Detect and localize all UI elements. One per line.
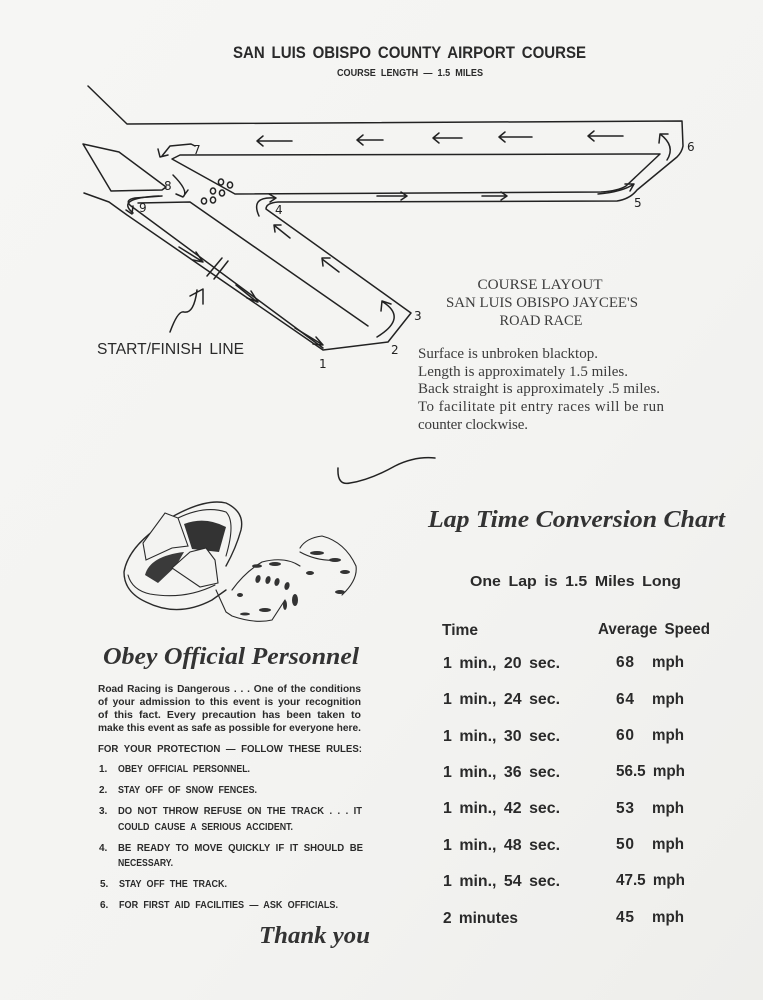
row 6: 50 [616, 836, 634, 853]
row 2: 1 min., 24 sec. [443, 691, 560, 708]
row 4: 56.5 mph [616, 763, 685, 780]
course description: To facilitate pit entry races will be run [418, 399, 664, 415]
course description: counter clockwise. [418, 417, 528, 433]
row 6: 1 min., 48 sec. [443, 837, 560, 854]
row 4: 1 min., 36 sec. [443, 764, 560, 781]
lap chart title: Lap Time Conversion Chart [427, 507, 726, 533]
rule 2: STAY OFF OF SNOW FENCES. [118, 785, 257, 796]
table header: Average Speed [598, 621, 710, 638]
rule 1: OBEY OFFICIAL PERSONNEL. [118, 764, 250, 775]
row 8: mph [652, 909, 684, 926]
course layout heading: ROAD RACE [500, 313, 582, 329]
row 5 [443, 800, 684, 817]
subtitle: COURSE LENGTH — 1.5 MILES [337, 67, 483, 79]
safety intro paragraph: of your admission to this event is your recognition [98, 697, 361, 708]
track outer boundary [84, 86, 683, 350]
lap chart subtitle: One Lap is 1.5 Miles Long [470, 573, 681, 590]
start finish label: START/FINISH LINE [97, 341, 244, 358]
rule 1: 1. [99, 764, 108, 775]
row 2: mph [652, 691, 684, 708]
paddock building [83, 144, 166, 191]
row 5: mph [652, 800, 684, 817]
course description: Surface is unbroken blacktop. [418, 346, 598, 362]
rules list [98, 744, 363, 911]
row 8: 45 [616, 909, 634, 926]
pit markers [201, 179, 233, 204]
start finish pointer [170, 289, 203, 332]
icon: helmet and gloves sketch [124, 502, 356, 621]
course map: 2 [391, 343, 399, 357]
rule 4 [99, 843, 363, 869]
course layout heading [446, 277, 638, 329]
rule 4: NECESSARY. [118, 858, 173, 869]
row 2: 64 [616, 691, 634, 708]
thank you: Thank you [259, 923, 370, 949]
row 5: 53 [616, 800, 634, 817]
rules heading: FOR YOUR PROTECTION — FOLLOW THESE RULES: [98, 744, 362, 755]
row 3: mph [652, 727, 684, 744]
rule 4: 4. [99, 843, 108, 854]
course map: 4 [275, 203, 283, 217]
course map: 7 [193, 143, 201, 157]
turn arrows [126, 144, 394, 345]
course map: 8 [164, 179, 172, 193]
lap time table [442, 621, 710, 927]
course description: Back straight is approximately .5 miles. [418, 381, 660, 397]
glove cuff and fingers [216, 536, 356, 621]
row 4 [443, 763, 685, 781]
course map: 5 [634, 196, 642, 210]
row 3: 1 min., 30 sec. [443, 728, 560, 745]
rule 3: DO NOT THROW REFUSE ON THE TRACK . . . IT [118, 806, 362, 817]
rule 5: STAY OFF THE TRACK. [119, 879, 227, 890]
table header [442, 621, 710, 639]
safety heading: Obey Official Personnel [103, 644, 359, 670]
safety intro paragraph: make this event as safe as possible for everyone here. [98, 723, 361, 734]
row 6 [443, 836, 684, 854]
safety intro paragraph [98, 684, 361, 734]
row 7: 47.5 mph [616, 872, 685, 889]
row 3: 60 [616, 727, 634, 744]
course map: 3 [414, 309, 422, 323]
rule 4: BE READY TO MOVE QUICKLY IF IT SHOULD BE [118, 843, 363, 854]
track inner infield south [128, 196, 368, 348]
row 7: 1 min., 54 sec. [443, 873, 560, 890]
table header: Time [442, 622, 478, 639]
row 8 [443, 909, 684, 927]
course layout heading: COURSE LAYOUT [478, 277, 602, 293]
row 7 [443, 872, 685, 890]
row 8: 2 minutes [443, 910, 518, 927]
safety intro paragraph: Road Racing is Dangerous . . . One of the conditions [98, 684, 361, 695]
rule 3: COULD CAUSE A SERIOUS ACCIDENT. [118, 822, 293, 833]
rule 2: 2. [99, 785, 108, 796]
row 1: mph [652, 654, 684, 671]
row 3 [443, 727, 684, 745]
course map: 6 [687, 140, 695, 154]
rule 6: 6. [100, 900, 109, 911]
course map [83, 86, 695, 371]
glove markings [237, 551, 350, 616]
course description [418, 346, 664, 433]
dark helmet lining [184, 521, 226, 552]
start finish line mark [207, 258, 228, 279]
course layout heading: SAN LUIS OBISPO JAYCEE'S [446, 295, 638, 311]
rule 3 [99, 806, 362, 833]
rule 6: FOR FIRST AID FACILITIES — ASK OFFICIALS. [119, 900, 338, 911]
row 1 [443, 654, 684, 672]
row 1: 1 min., 20 sec. [443, 655, 560, 672]
row 6: mph [652, 836, 684, 853]
rule 3: 3. [99, 806, 108, 817]
row 1: 68 [616, 654, 634, 671]
course map: 9 [139, 201, 147, 215]
row 5: 1 min., 42 sec. [443, 800, 560, 817]
hand drawn squiggle [338, 458, 435, 483]
direction arrows [257, 131, 670, 200]
title: SAN LUIS OBISPO COUNTY AIRPORT COURSE [233, 43, 586, 62]
row 2 [443, 691, 684, 708]
turn numbers: 1 [319, 357, 327, 371]
helmet visor flap [143, 513, 188, 560]
track inner infield north [172, 154, 660, 194]
rule 5: 5. [100, 879, 109, 890]
course description: Length is approximately 1.5 miles. [418, 364, 628, 380]
safety intro paragraph: of this fact. Every precaution has been taken to [98, 710, 361, 721]
helmet shell [124, 502, 242, 610]
